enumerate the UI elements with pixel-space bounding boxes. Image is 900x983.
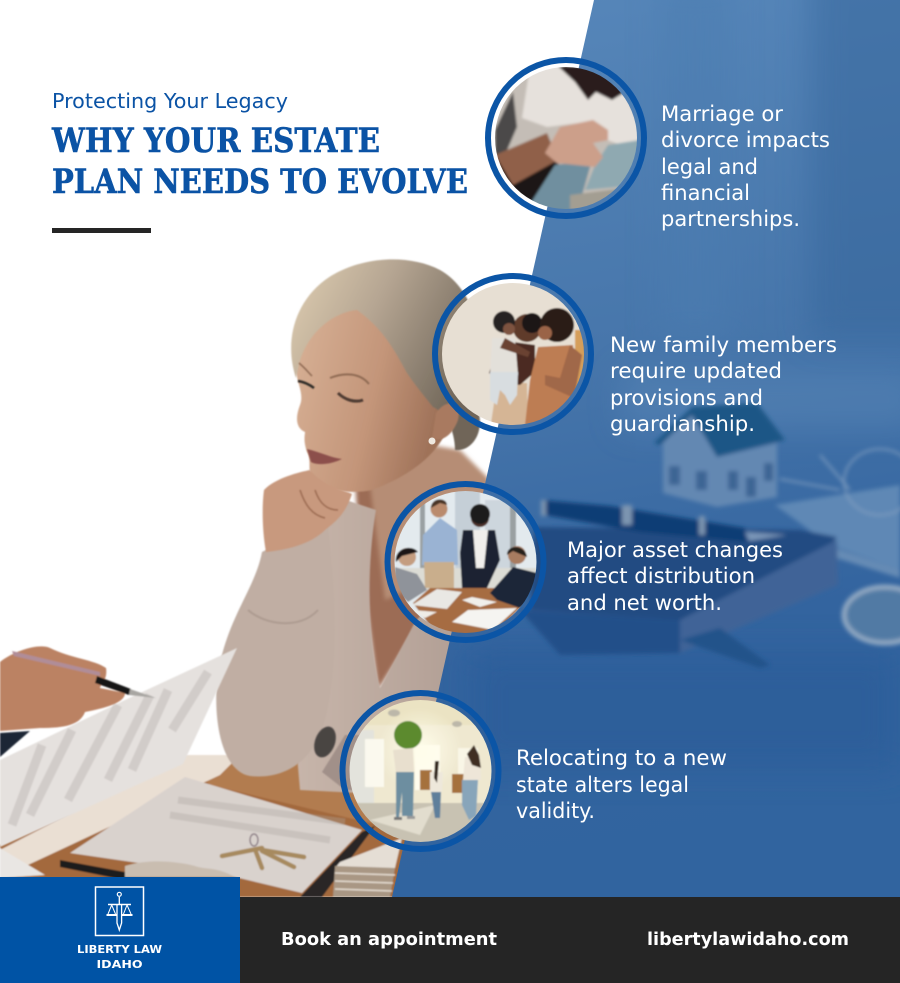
icon: sword and scales bbox=[96, 887, 144, 936]
other arm bbox=[322, 735, 400, 790]
sweater body bbox=[280, 498, 495, 800]
brows and eyes bbox=[298, 363, 369, 401]
text: relocating bbox=[516, 746, 727, 823]
text: new family members: provisions and bbox=[610, 386, 763, 410]
lips bbox=[307, 449, 342, 464]
footer bar: Book an appointment bbox=[281, 929, 497, 950]
text: new family members: New family members bbox=[610, 333, 837, 357]
circle: marriage photo bbox=[488, 60, 645, 216]
text: new family members: guardianship. bbox=[610, 412, 755, 436]
text: major asset changes bbox=[567, 538, 783, 615]
magnifier bbox=[844, 587, 900, 643]
face bbox=[296, 302, 450, 492]
eyebrow text: Protecting Your Legacy bbox=[52, 89, 288, 113]
panel: blue overlay bbox=[380, 0, 900, 897]
book bbox=[530, 527, 837, 620]
text: marriage or divorce: partnerships. bbox=[661, 207, 800, 231]
books bbox=[335, 838, 402, 868]
text: relocating: validity. bbox=[516, 799, 595, 823]
circle: relocation photo bbox=[342, 693, 500, 850]
text: marriage or divorce: legal and bbox=[661, 155, 758, 179]
text: new family members: require updated bbox=[610, 359, 782, 383]
footer bar bbox=[240, 897, 900, 983]
glasses bbox=[780, 449, 900, 515]
circle: asset meeting photo bbox=[388, 484, 544, 640]
forearm sleeve bbox=[216, 525, 335, 777]
chest bbox=[355, 470, 490, 690]
pen bbox=[541, 500, 747, 542]
title rule bbox=[52, 228, 151, 233]
text: major asset changes: and net worth. bbox=[567, 591, 722, 615]
footer bar: libertylawidaho.com bbox=[647, 929, 849, 950]
text: marriage or divorce: Marriage or bbox=[661, 102, 783, 126]
neck bbox=[370, 445, 490, 600]
text: new family members bbox=[610, 333, 837, 436]
logo block: LIBERTY LAW bbox=[77, 943, 162, 956]
text: marriage or divorce: divorce impacts bbox=[661, 128, 830, 152]
marriage photo content bbox=[495, 67, 637, 209]
keys bbox=[222, 834, 304, 868]
text: relocating: Relocating to a new bbox=[516, 746, 727, 770]
clipboard bbox=[60, 860, 125, 880]
watch bbox=[310, 724, 340, 760]
title bbox=[51, 121, 468, 202]
photo: desk scene with house, pen and book bbox=[520, 403, 900, 668]
photo: woman thinking bbox=[216, 259, 495, 800]
meeting photo content bbox=[394, 491, 536, 633]
text: relocating: state alters legal bbox=[516, 773, 689, 797]
circle: new family photo bbox=[435, 276, 591, 432]
relocation photo content bbox=[350, 700, 492, 842]
photo: desk with documents and keys bbox=[0, 755, 420, 897]
title: PLAN NEEDS TO EVOLVE bbox=[52, 162, 468, 202]
house bbox=[663, 413, 777, 507]
text: major asset changes: Major asset changes bbox=[567, 538, 783, 562]
hair bbox=[291, 259, 483, 450]
hand under chin bbox=[263, 470, 352, 552]
ear and earring bbox=[432, 404, 459, 439]
text: marriage or divorce bbox=[661, 102, 830, 231]
photo: held contract and hand with pen bbox=[0, 646, 237, 847]
text: major asset changes: affect distribution bbox=[567, 564, 755, 588]
logo block: IDAHO bbox=[96, 958, 142, 971]
text: marriage or divorce: financial bbox=[661, 181, 750, 205]
logo block bbox=[0, 877, 240, 983]
title: WHY YOUR ESTATE bbox=[51, 121, 380, 161]
family photo content bbox=[442, 283, 584, 425]
